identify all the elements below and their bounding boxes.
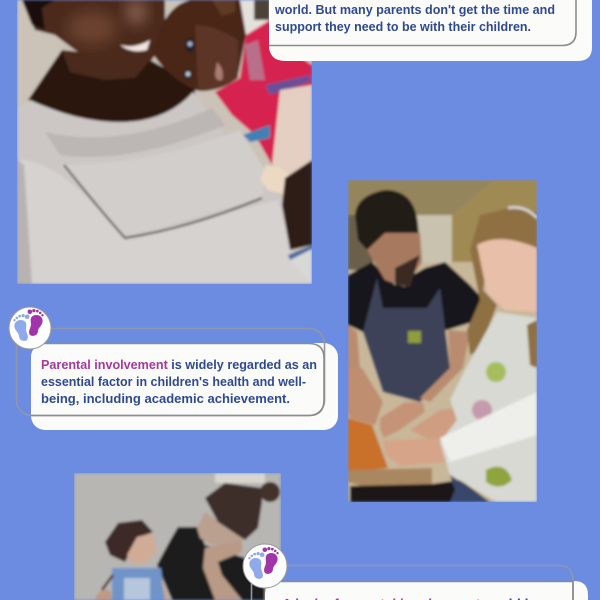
text: top panel copy: world. But many parents don't get the time and	[274, 3, 555, 17]
photo: mother holding baby	[17, 0, 312, 284]
panel: parental involvement callout	[16, 328, 338, 430]
panel: top text box	[269, 0, 592, 61]
text: top panel copy: support they need to be with their children.	[275, 20, 531, 34]
panel: parental involvement callout: being, including academic achievement.	[41, 392, 290, 406]
photo: mother and toddler	[74, 473, 281, 600]
photo: father and daughter cooking	[348, 180, 537, 502]
text: parental involvement copy: Parental involvement is widely regarded as an	[41, 358, 317, 372]
icon: footprints badge middle	[9, 307, 51, 349]
panel: bottom text box	[252, 566, 588, 600]
icon: footprints badge bottom	[243, 544, 287, 588]
text: top panel copy	[274, 3, 555, 34]
panel: parental involvement callout: essential factor in children's health and well-	[41, 375, 306, 389]
